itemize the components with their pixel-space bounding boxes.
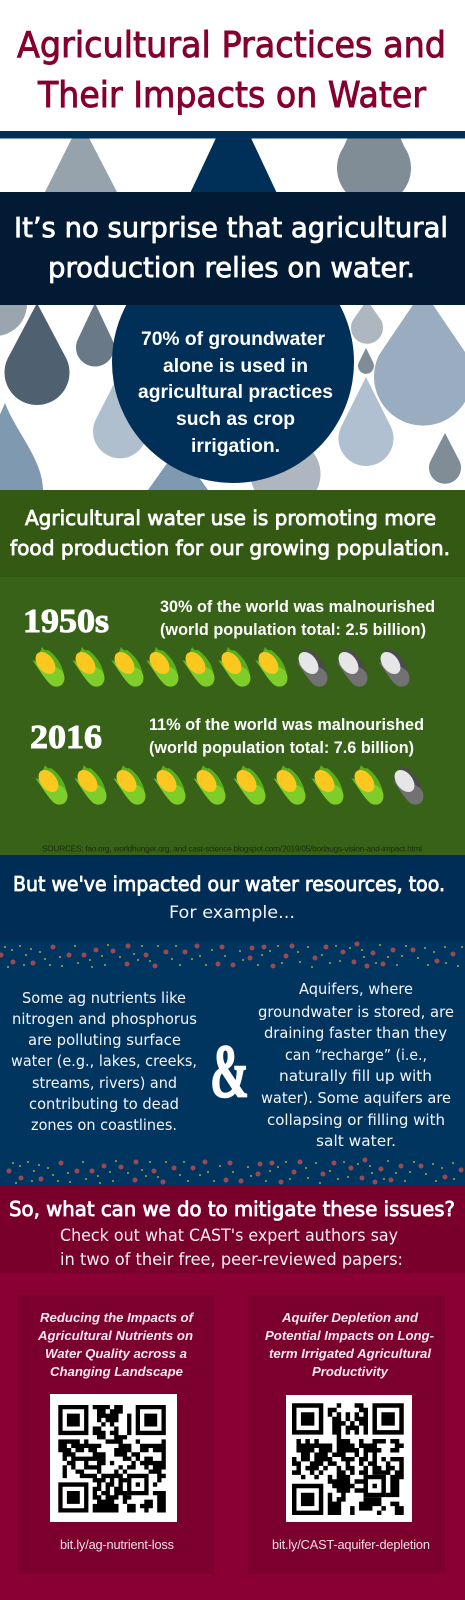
title: Their Impacts on Water [37, 75, 426, 116]
panel: water impacts heading: For example... [169, 903, 295, 923]
title [17, 25, 446, 116]
panel: malnourishment comparison: 30% of the world was malnourished [160, 598, 435, 616]
text block: nutrients: Some ag nutrients like [22, 989, 186, 1007]
panel: malnourishment comparison: 1950s [23, 603, 109, 640]
text block: nutrients: zones on coastlines. [31, 1116, 177, 1134]
navy drop: circle panel with statistic: 70% of groundwater [141, 329, 325, 350]
panel: malnourishment comparison: SOURCES: fao.org, worldhunger.org, and cast-science.blogspot.com/2019/05/borlaugs-vision-and-impact.html [42, 844, 422, 854]
panel: mitigation heading: Check out what CAST's expert authors say [60, 1226, 398, 1246]
panel: nutrient paper card [18, 1295, 214, 1574]
navy drop: circle panel with statistic: alone is used in [163, 356, 308, 377]
QR code: nutrient paper [50, 1394, 177, 1522]
icons: corn row 1950s [32, 647, 409, 687]
decorative dotted band lower [9, 1160, 465, 1183]
panel: water impacts background [0, 855, 465, 1185]
panel: intro heading band: It’s no surprise that agricultural [14, 211, 448, 244]
text block: aquifers [258, 980, 454, 1150]
text block: aquifers: Aquifers, where [299, 980, 413, 998]
panel: intro heading band: production relies on water. [48, 251, 415, 284]
text block: aquifers: salt water. [316, 1132, 396, 1150]
text block: nutrients: streams, rivers) and [32, 1074, 177, 1092]
panel: nutrient paper card: bit.ly/ag-nutrient-loss [60, 1537, 174, 1552]
panel: mitigation heading [0, 1185, 465, 1273]
water drops illustration [0, 130, 465, 509]
text block: nutrients [11, 989, 197, 1134]
panel: nutrient paper card: Water Quality across a [45, 1346, 187, 1361]
panel: food production heading [0, 490, 465, 577]
panel: food production heading: food production for our growing population. [10, 536, 450, 560]
panel: nutrient paper card: Agricultural Nutrients on [37, 1328, 193, 1343]
panel: malnourishment comparison: (world population total: 2.5 billion) [160, 621, 426, 639]
text block: nutrients: nitrogen and phosphorus [12, 1010, 197, 1028]
panel: food production heading: Agricultural water use is promoting more [25, 506, 436, 530]
navy drop: circle panel with statistic: agricultural practices [138, 382, 333, 403]
panel: nutrient paper card: Changing Landscape [50, 1364, 183, 1379]
panel: malnourishment comparison: (world population total: 7.6 billion) [149, 739, 414, 757]
navy drop: circle panel with statistic: such as crop [176, 409, 295, 430]
icons: corn row 2016 [35, 765, 423, 805]
decorative dotted band upper [1, 944, 462, 967]
panel: mitigation heading: So, what can we do to mitigate these issues? [9, 1197, 455, 1221]
panel: aquifer paper card: Potential Impacts on Long- [265, 1328, 435, 1343]
panel: nutrient paper card: Reducing the Impacts of [40, 1310, 195, 1325]
title: Agricultural Practices and [17, 25, 446, 66]
icon: ampersand: & [210, 1030, 249, 1114]
top navy bar [0, 131, 465, 138]
text block: aquifers: groundwater is stored, are [258, 1003, 454, 1021]
panel: aquifer paper card: Productivity [312, 1364, 389, 1379]
panel: mitigation heading: in two of their free, peer-reviewed papers: [60, 1250, 403, 1270]
text block: aquifers: can “recharge” (i.e., [285, 1046, 427, 1064]
title band [0, 0, 465, 131]
QR code: aquifer paper [286, 1395, 412, 1522]
panel: malnourishment comparison: 2016 [30, 719, 102, 756]
panel: aquifer paper card: term Irrigated Agricultural [269, 1346, 431, 1361]
text block: nutrients: contributing to dead [29, 1095, 179, 1113]
panel: malnourishment comparison [0, 577, 465, 855]
text block: aquifers: water). Some aquifers are [261, 1089, 451, 1107]
panel: aquifer paper card [248, 1295, 445, 1574]
panel: aquifer paper card: bit.ly/CAST-aquifer-depletion [272, 1537, 430, 1552]
panel: papers background [0, 1185, 465, 1600]
text block: nutrients: water (e.g., lakes, creeks, [11, 1052, 197, 1070]
text block: aquifers: draining faster than they [264, 1024, 447, 1042]
panel: water impacts heading [0, 855, 465, 941]
panel: intro heading band [0, 192, 465, 305]
text block: aquifers: naturally fill up with [279, 1067, 432, 1085]
panel: water impacts heading: But we've impacted our water resources, too. [13, 872, 445, 896]
text block: nutrients: are polluting surface [28, 1031, 181, 1049]
text block: aquifers: collapsing or filling with [267, 1111, 445, 1129]
panel: malnourishment comparison: 11% of the world was malnourished [149, 716, 424, 734]
panel: aquifer paper card: Aquifer Depletion and [281, 1310, 419, 1325]
navy drop: circle panel with statistic: irrigation. [191, 436, 280, 457]
navy drop: circle panel with statistic [112, 138, 354, 483]
